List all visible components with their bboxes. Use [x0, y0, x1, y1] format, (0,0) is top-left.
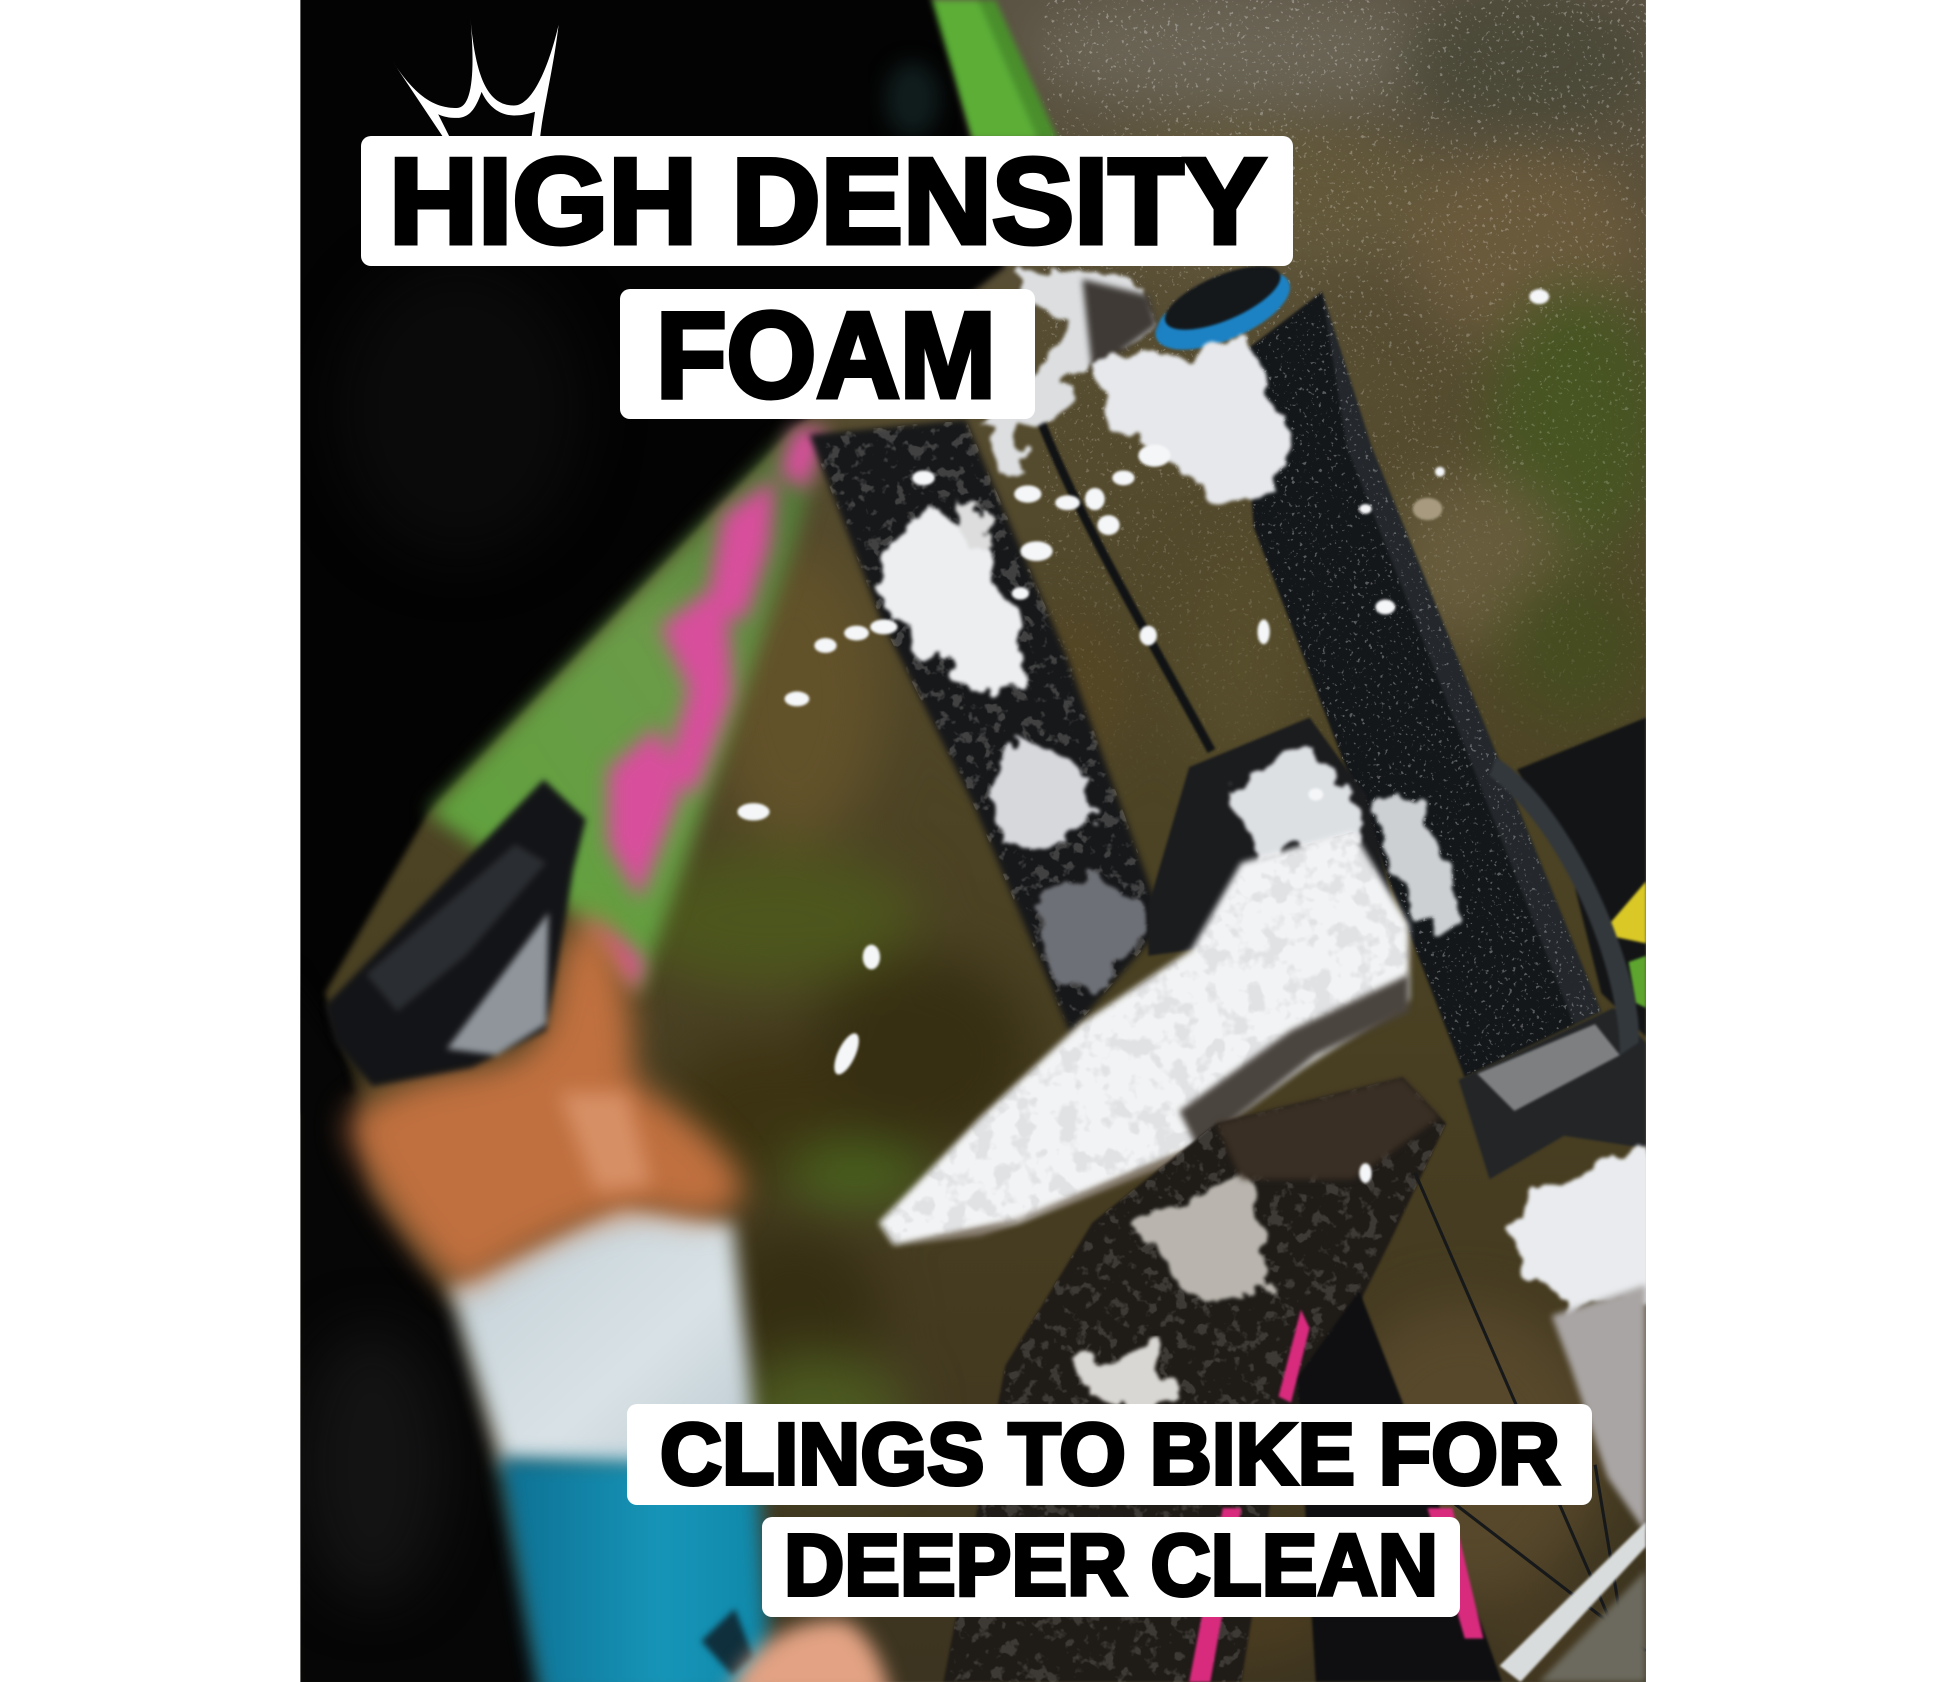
- foam bottle: [449, 1202, 772, 1682]
- foam patches on left fork leg: [869, 497, 1148, 993]
- down tube: green frame with pink lettering: [428, 428, 829, 996]
- hand holding sprayer: [348, 916, 742, 1291]
- label: FOAM: FOAM: [656, 287, 996, 423]
- photo: foam sprayed on mountain bike fork: [285, 0, 1663, 1682]
- sprayer nozzle: [325, 780, 586, 1086]
- label: CLINGS TO BIKE FOR: CLINGS TO BIKE FOR: [660, 1406, 1560, 1503]
- left fork leg: [807, 420, 1179, 1043]
- rear fork leg and pink graphic: [1189, 1291, 1502, 1682]
- top-right tyre and shock boot: [1459, 717, 1646, 1179]
- front fender with foam: [869, 717, 1465, 1254]
- label: DEEPER CLEAN: DEEPER CLEAN: [784, 1517, 1438, 1614]
- label: HIGH DENSITY: HIGH DENSITY: [389, 133, 1266, 269]
- blue fork cap: [1154, 266, 1292, 352]
- blurred foreground sleeve: [285, 968, 546, 1682]
- infographic poster: [300, 0, 1646, 1682]
- foam on fork crown: [968, 267, 1285, 511]
- spokes: [1415, 1173, 1646, 1657]
- top tube: green frame: [925, 0, 1058, 139]
- brake cable: [1040, 420, 1212, 751]
- background specks of spray: [1043, 0, 1646, 819]
- right fork stanchion: [1241, 285, 1607, 1080]
- dark foreground rider silhouette: [288, 0, 1005, 1117]
- brake rotor: [1539, 1570, 1646, 1682]
- flying foam flecks: [737, 289, 1549, 1183]
- front tyre and lower fork: [943, 1077, 1452, 1682]
- logo: crown outline: [392, 19, 559, 139]
- foam on right of wheel: [1502, 1148, 1663, 1533]
- photo background: blurred muddy grass: [300, 0, 1663, 1682]
